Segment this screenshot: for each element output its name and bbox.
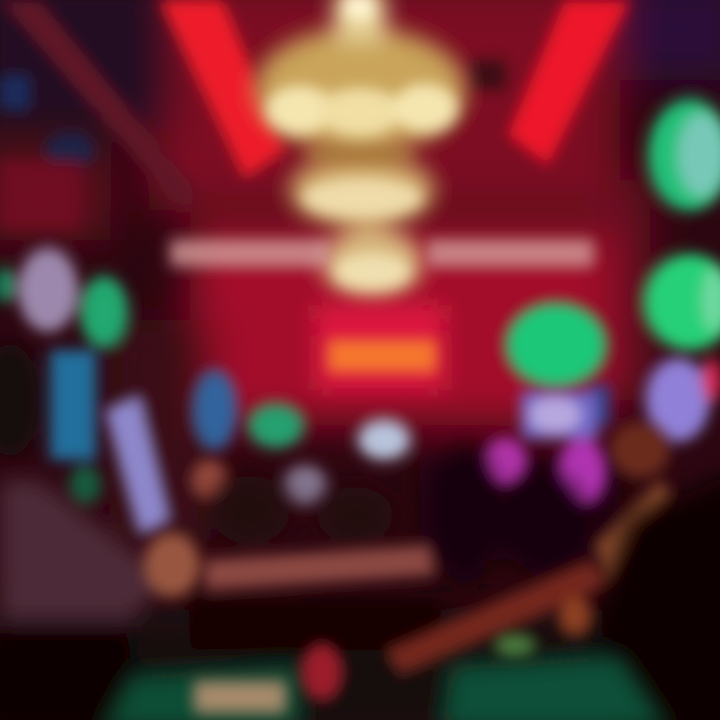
chips and cards bbox=[195, 595, 591, 712]
green lamp right top bbox=[648, 99, 720, 211]
chandelier bbox=[255, 0, 465, 296]
foreground person right bbox=[385, 422, 720, 720]
diagonal beam left bbox=[0, 0, 200, 230]
green felt table foreground bbox=[100, 655, 670, 720]
green lamp centre right bbox=[506, 303, 610, 425]
red neon ceiling strips bbox=[160, 0, 630, 178]
foreground person left bbox=[0, 344, 200, 720]
purple lights right bbox=[483, 358, 720, 506]
crowd silhouettes bbox=[210, 445, 585, 585]
green lamp right middle bbox=[644, 254, 720, 350]
centre small lights bbox=[192, 404, 410, 505]
left side screens bbox=[0, 248, 237, 535]
table bbox=[190, 545, 440, 650]
horizontal pale sign band bbox=[170, 240, 593, 266]
orange glowing sign bbox=[315, 305, 445, 390]
